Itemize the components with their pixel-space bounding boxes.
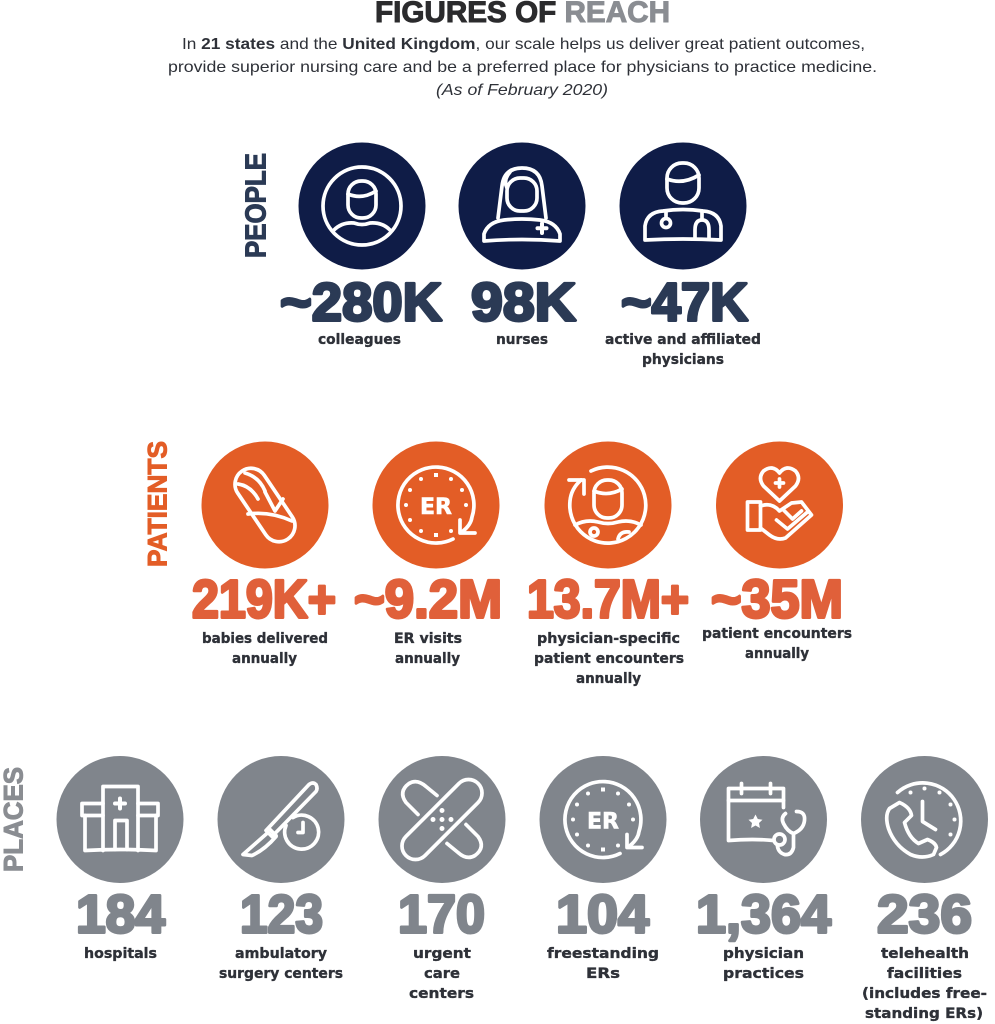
- stats: patients: [192, 570, 843, 630]
- labels: patients: patient encounters: [702, 626, 852, 642]
- icon: calendar and stethoscope: [700, 756, 827, 883]
- stats: places: 123: [240, 884, 323, 944]
- icon: phone and clock: [861, 756, 988, 883]
- stats: places: 170: [398, 884, 485, 944]
- icon: heart in hand: [716, 442, 843, 568]
- panel: places: [0, 756, 988, 1022]
- labels: places: facilities: [887, 966, 962, 982]
- labels: places: standing ERs): [865, 1006, 983, 1022]
- icon: freestanding ER: ER: [587, 810, 619, 834]
- intro text: In 21 states and the United Kingdom , our scale helps us deliver great patient outcomes,: [182, 36, 865, 53]
- heading: patients: PATIENTS: [142, 441, 172, 567]
- stats: people: ~47K: [621, 272, 748, 332]
- labels: places: [84, 946, 987, 1022]
- icon: freestanding ER: [540, 756, 666, 883]
- labels: places: practices: [723, 966, 804, 982]
- heading: people: PEOPLE: [240, 153, 272, 258]
- icon: colleagues: [298, 142, 426, 270]
- stats: people: [280, 272, 748, 332]
- labels: people: active and affiliated: [605, 332, 761, 348]
- stats: places: 236: [877, 884, 972, 944]
- labels: patients: annually: [745, 646, 809, 662]
- stats: people: ~280K: [280, 272, 442, 332]
- stats: places: 1,364: [696, 884, 831, 944]
- panel: people: [240, 142, 761, 368]
- stats: places: 184: [76, 884, 165, 944]
- labels: places: physician: [723, 946, 804, 962]
- labels: places: ambulatory: [235, 946, 328, 962]
- stats: places: [76, 884, 972, 944]
- labels: places: centers: [409, 986, 474, 1002]
- stats: places: 104: [556, 884, 649, 944]
- intro text: provide superior nursing care and be a preferred place for physicians to practice medicine.: [168, 59, 877, 76]
- labels: people: [318, 332, 761, 368]
- labels: patients: ER visits: [394, 631, 462, 647]
- labels: patients: patient encounters: [534, 651, 684, 667]
- icon: nurse: [458, 142, 586, 270]
- labels: places: care: [424, 966, 460, 982]
- intro text: (As of February 2020): [436, 82, 608, 99]
- stats: patients: ~35M: [711, 570, 843, 630]
- stats: patients: 219K+: [192, 570, 336, 630]
- labels: patients: annually: [232, 651, 298, 667]
- stats: patients: ~9.2M: [354, 570, 502, 630]
- labels: places: hospitals: [84, 946, 157, 962]
- labels: people: nurses: [496, 332, 548, 348]
- icon: baby: [202, 442, 328, 568]
- labels: places: ERs: [586, 966, 620, 982]
- labels: people: physicians: [642, 352, 724, 368]
- icon: physician: [620, 142, 746, 270]
- icon: scalpel and clock: [218, 756, 344, 883]
- labels: places: urgent: [413, 946, 471, 962]
- labels: places: surgery centers: [219, 966, 343, 982]
- labels: places: telehealth: [881, 946, 969, 962]
- intro text: [168, 36, 877, 99]
- panel: patients: [142, 441, 852, 687]
- icon: ER visits: [372, 442, 500, 568]
- labels: places: (includes free-: [862, 986, 987, 1002]
- icon: hospital: [56, 756, 184, 883]
- labels: places: freestanding: [547, 946, 659, 962]
- labels: patients: babies delivered: [202, 631, 328, 647]
- labels: people: colleagues: [318, 332, 401, 348]
- icon: ER visits: ER: [420, 495, 452, 520]
- stats: patients: 13.7M+: [527, 570, 689, 630]
- labels: patients: physician-specific: [537, 631, 680, 647]
- icon: physician-specific encounters: [544, 442, 672, 568]
- stats: people: 98K: [471, 272, 576, 332]
- labels: patients: annually: [576, 671, 642, 687]
- labels: patients: annually: [395, 651, 461, 667]
- icon: bandage: [378, 756, 506, 883]
- labels: patients: [202, 626, 852, 687]
